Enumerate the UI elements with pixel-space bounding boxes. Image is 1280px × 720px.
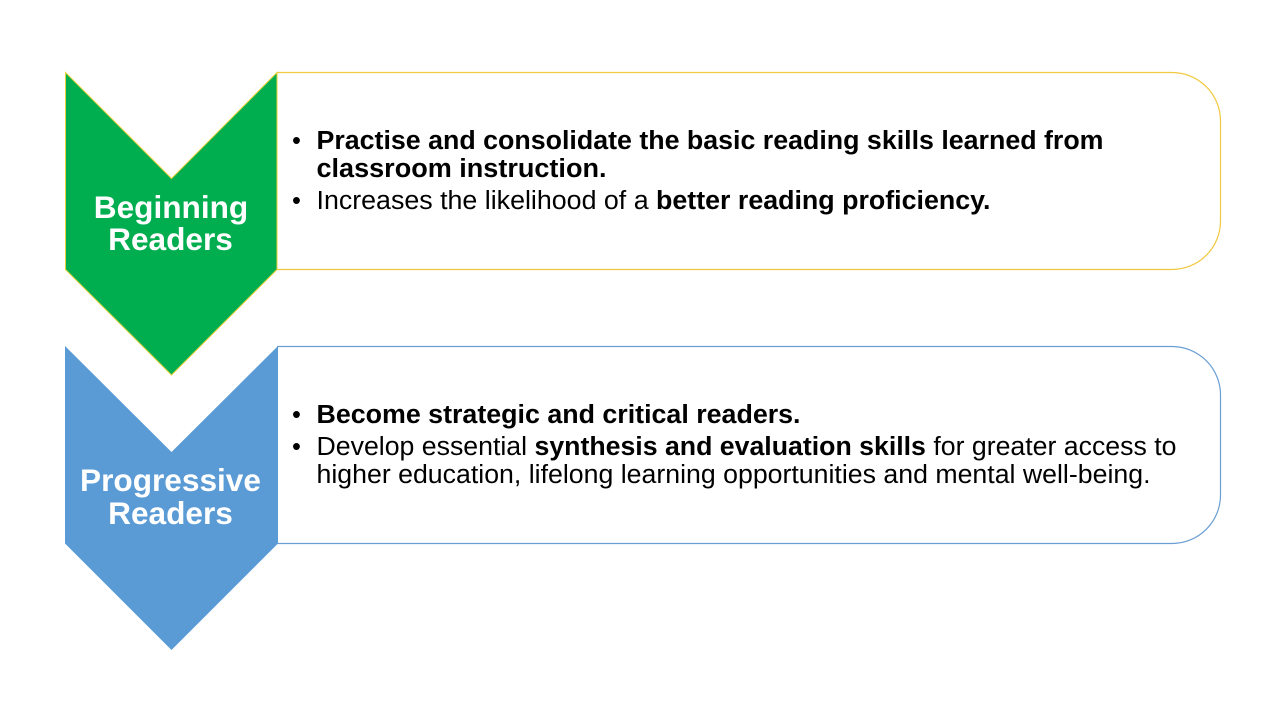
bullet 2: • xyxy=(292,433,301,461)
bullet 1: • xyxy=(292,127,301,155)
panel: beginning readers xyxy=(66,72,1220,375)
bullet 1: • xyxy=(292,401,301,429)
bullet 2: • xyxy=(292,187,301,215)
bullet 1 line 2: classroom instruction. xyxy=(316,155,606,183)
bullet 2 line 2: higher education, lifelong learning opportunities and mental well-being. xyxy=(316,461,1150,489)
chevron: beginning readers xyxy=(66,72,277,375)
bullet 1 text: Become strategic and critical readers. xyxy=(316,401,800,429)
chevron: progressive readers xyxy=(65,346,278,650)
bullet 1 line 1: Practise and consolidate the basic reading skills learned from xyxy=(316,127,1104,155)
text panel: beginning readers outline xyxy=(277,72,1220,270)
bullet 2 line 1: Develop essential synthesis and evaluation skills for greater access to xyxy=(316,433,1176,461)
heading line: readers: Readers xyxy=(108,495,233,531)
bullet 2 text: Increases the likelihood of a better reading proficiency. xyxy=(316,187,990,215)
panel: progressive readers xyxy=(65,346,1220,650)
bullet text block: progressive readers xyxy=(292,401,1176,489)
heading: beginning readers: Beginning xyxy=(94,189,248,225)
bullet text block: beginning readers xyxy=(292,127,1104,215)
heading line: readers: Readers xyxy=(108,221,233,257)
text panel: progressive readers outline xyxy=(277,346,1220,544)
heading: progressive readers: Progressive xyxy=(80,462,261,498)
